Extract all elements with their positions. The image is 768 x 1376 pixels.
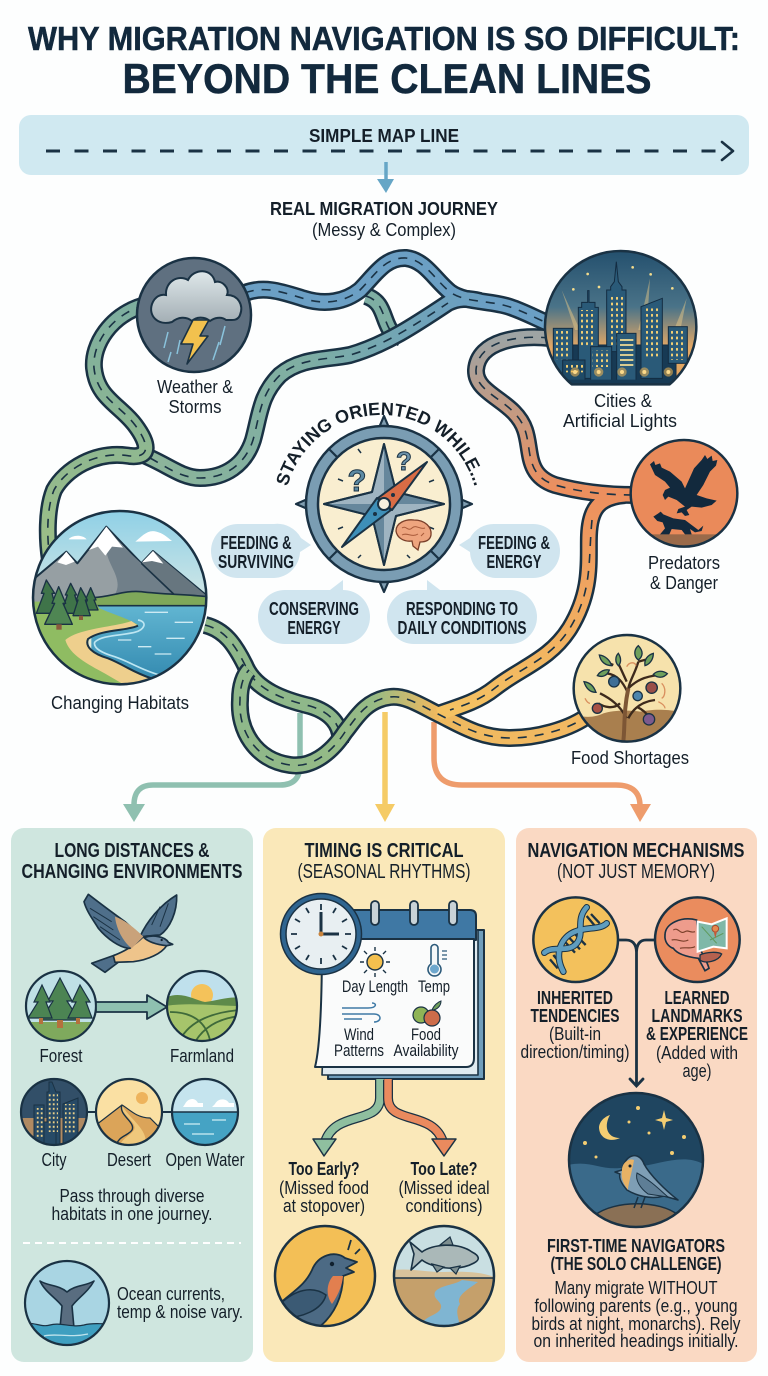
icon: brain and map <box>655 897 740 982</box>
title <box>28 20 740 102</box>
icon: changing habitats <box>31 511 208 688</box>
text: too early <box>279 1159 369 1216</box>
heading: timing is critical: TIMING IS CRITICAL <box>304 840 464 862</box>
icon: flying bird <box>84 894 177 972</box>
icon: bird at night <box>568 1093 705 1230</box>
label: open water: Open Water <box>166 1150 245 1170</box>
panel: simple map line <box>19 115 749 175</box>
icon: compass: ? <box>348 463 366 498</box>
icon: thermometer <box>428 944 447 976</box>
text: solo challenge description: on inherited headings initially. <box>534 1331 738 1351</box>
heading: real migration journey: REAL MIGRATION JOURNEY <box>270 199 498 219</box>
icon: forest <box>25 971 97 1044</box>
compass heading: STAYING ORIENTED WHILE... <box>276 402 480 486</box>
label: predators and danger: Predators <box>648 553 720 573</box>
label: forest: Forest <box>40 1046 82 1066</box>
label: food availability: Food <box>411 1025 441 1044</box>
text: ocean conditions <box>117 1284 243 1322</box>
callout: feeding and energy: FEEDING & <box>478 533 550 553</box>
text: too late: conditions) <box>406 1196 482 1216</box>
text: too late <box>398 1159 490 1216</box>
icon: wind <box>342 1003 380 1022</box>
icon: cities and artificial lights <box>545 251 696 387</box>
text: inherited tendencies: INHERITED <box>537 988 613 1008</box>
winding migration road <box>48 258 635 765</box>
label: weather and storms <box>157 377 233 417</box>
icon: clock <box>280 894 362 974</box>
text: inherited tendencies <box>520 988 630 1062</box>
callout: conserving energy: ENERGY <box>288 618 340 638</box>
heading: real migration journey: (Messy & Complex) <box>312 220 456 240</box>
icon: calendar <box>315 901 484 1079</box>
arrow: too late <box>388 1079 456 1156</box>
label: temp: Temp <box>418 977 450 996</box>
arrow: orange to panel three <box>434 722 651 822</box>
label: city: City <box>42 1150 66 1170</box>
text: solo challenge description <box>532 1278 740 1351</box>
label: farmland: Farmland <box>170 1046 234 1066</box>
text: learned landmarks: age) <box>682 1061 712 1081</box>
label: predators and danger: & Danger <box>650 573 718 593</box>
text: first-time navigators: (THE SOLO CHALLENGE) <box>550 1254 722 1274</box>
icon: food shortages <box>574 635 680 745</box>
connector arrow: mechanisms to first-time navigators <box>618 940 655 1086</box>
icon: farmland <box>165 971 240 1045</box>
label: wind patterns: Patterns <box>334 1041 384 1060</box>
text: diverse habitats: habitats in one journey. <box>52 1204 212 1224</box>
heading: timing is critical <box>298 840 470 883</box>
label: food availability <box>394 1025 459 1060</box>
icon: desert <box>96 1079 162 1146</box>
text: first-time navigators <box>547 1236 725 1274</box>
heading: navigation mechanisms: (NOT JUST MEMORY) <box>557 861 715 883</box>
heading: timing is critical: (SEASONAL RHYTHMS) <box>298 861 470 883</box>
callout: feeding and energy <box>459 524 560 578</box>
arrow: too early <box>313 1079 380 1156</box>
heading: real migration journey <box>270 199 498 240</box>
label: weather and storms: Weather & <box>157 377 233 397</box>
icon: whale tail <box>22 1261 112 1350</box>
text: solo challenge description: following parents (e.g., young <box>534 1296 738 1316</box>
icon: calling bird <box>270 1226 375 1328</box>
callout: conserving energy <box>258 580 370 644</box>
icon: compass: ? <box>396 446 412 476</box>
icon: open water <box>170 1079 240 1148</box>
text: first-time navigators: FIRST-TIME NAVIGATORS <box>547 1236 725 1256</box>
callout: feeding and surviving: FEEDING & <box>220 533 292 553</box>
label: food availability: Availability <box>394 1041 459 1060</box>
text: ocean conditions: temp & noise vary. <box>117 1302 243 1322</box>
panel: timing is critical <box>263 828 505 1362</box>
arrow: yellow to panel two <box>375 712 395 822</box>
text: inherited tendencies: TENDENCIES <box>530 1006 620 1026</box>
label: cities and artificial lights: Artificial Lights <box>563 411 677 431</box>
icon: salmon and dry river <box>394 1226 496 1326</box>
icon: weather and storms <box>137 258 251 372</box>
text: too early: at stopover) <box>283 1196 365 1216</box>
text: learned landmarks: LEARNED <box>664 988 730 1008</box>
callout: feeding and surviving: SURVIVING <box>218 552 294 572</box>
text: too early: Too Early? <box>288 1159 360 1179</box>
label: day length: Day Length <box>342 977 408 996</box>
text: ocean conditions: Ocean currents, <box>117 1284 225 1304</box>
callout: responding to daily conditions: RESPONDING TO <box>406 599 518 619</box>
text: too early: (Missed food <box>279 1178 369 1198</box>
label: changing habitats: Changing Habitats <box>51 693 189 713</box>
label: desert: Desert <box>107 1150 151 1170</box>
label: weather and storms: Storms <box>168 397 222 417</box>
callout: responding to daily conditions: DAILY CONDITIONS <box>398 618 526 638</box>
callout: feeding and surviving <box>211 524 311 578</box>
panel: simple map line: SIMPLE MAP LINE <box>309 126 459 146</box>
text: learned landmarks: LANDMARKS <box>652 1006 742 1026</box>
text: solo challenge description: Many migrate WITHOUT <box>554 1278 718 1298</box>
heading: long distances: CHANGING ENVIRONMENTS <box>22 861 242 883</box>
callout: responding to daily conditions <box>387 580 537 644</box>
text: learned landmarks <box>646 988 748 1081</box>
heading: long distances <box>22 840 242 883</box>
heading: long distances: LONG DISTANCES & <box>54 840 210 862</box>
panel: navigation mechanisms <box>516 828 757 1362</box>
icon: predators and danger <box>627 440 740 551</box>
arrow: map line to real journey <box>377 162 394 193</box>
panel: long distances and changing environments <box>11 828 253 1362</box>
label: cities and artificial lights: Cities & <box>594 391 652 411</box>
text: too late: (Missed ideal <box>398 1178 490 1198</box>
arrow: forest to farmland <box>96 995 167 1019</box>
label: cities and artificial lights <box>563 391 677 431</box>
label: food shortages: Food Shortages <box>571 748 689 768</box>
icon: apples <box>413 1001 441 1026</box>
title: BEYOND THE CLEAN LINES <box>122 55 652 102</box>
text: inherited tendencies: (Built-in <box>549 1024 601 1044</box>
icon: sun <box>360 947 390 977</box>
icon: compass <box>296 416 472 592</box>
text: diverse habitats: Pass through diverse <box>60 1186 204 1206</box>
text: inherited tendencies: direction/timing) <box>520 1042 630 1062</box>
callout: conserving energy: CONSERVING <box>269 599 359 619</box>
text: learned landmarks: (Added with <box>656 1043 738 1063</box>
label: wind patterns <box>334 1025 384 1060</box>
text: too late: Too Late? <box>410 1159 478 1179</box>
connector lines <box>87 1111 172 1113</box>
icon: DNA <box>533 897 618 982</box>
callout: feeding and energy: ENERGY <box>486 552 542 572</box>
heading: navigation mechanisms <box>528 840 744 883</box>
arrow: teal to panel one <box>123 713 300 822</box>
icon: city <box>20 1079 90 1148</box>
text: diverse habitats <box>52 1186 212 1224</box>
label: predators and danger <box>648 553 720 593</box>
label: wind patterns: Wind <box>344 1025 374 1044</box>
